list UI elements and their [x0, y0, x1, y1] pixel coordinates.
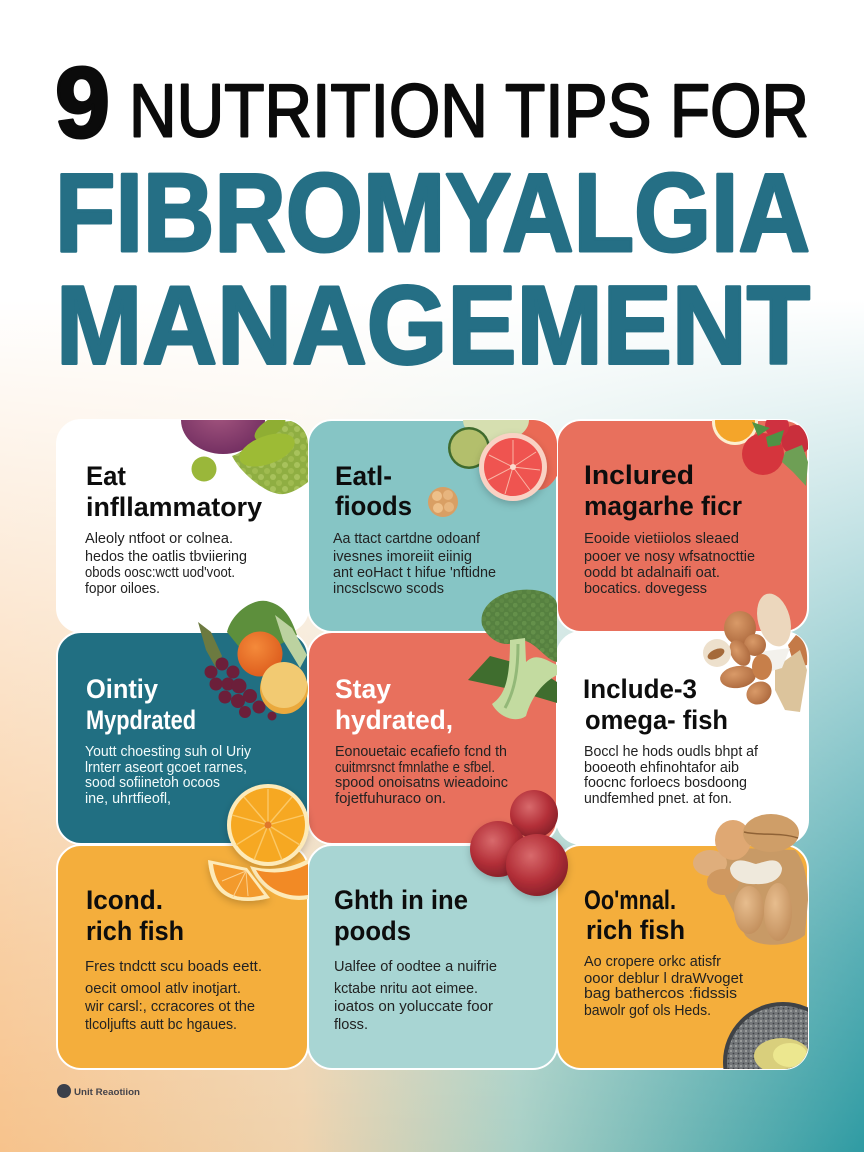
card 4 body text: Youtt choesting suh ol Uriy — [85, 744, 252, 760]
card 5 body text — [335, 744, 508, 807]
card 9 heading — [584, 885, 685, 945]
card 8 body text — [334, 959, 497, 1033]
card 9 body text: Ao cropere orkc atisfr — [584, 954, 721, 970]
card 3 body text — [584, 531, 755, 597]
card 7 heading: rich fish — [86, 916, 184, 946]
card 3 body text: pooer ve nosy wfsatnocttie — [584, 549, 755, 565]
card 2 heading — [335, 461, 412, 521]
card 7 heading: Icond. — [86, 885, 163, 915]
icon: bowl of seeds — [723, 1002, 808, 1069]
card 4 heading: Ointiy — [86, 674, 158, 704]
card 5 body text: fojetfuhuraco on. — [335, 791, 446, 807]
icon: red apples — [470, 790, 568, 896]
card 6 body text: foocnc forloecs bosdoong — [584, 775, 747, 791]
card 5 body text: spood onoisatns wieadoinc — [335, 775, 508, 791]
card 2 body text: ant eoHact t hifue 'nftidne — [333, 565, 496, 581]
icon: broccoli — [468, 590, 557, 719]
card 9 body text: ooor deblur l draWvoget — [584, 971, 743, 987]
panel: card 3 coral — [557, 420, 808, 632]
title — [55, 47, 810, 388]
card 8 body text: ioatos on yoluccate foor — [334, 999, 493, 1015]
card 2 body text: Aa ttact cartdne odoanf — [333, 531, 481, 547]
card 8 body text: kctabe nritu aot eimee. — [334, 981, 478, 997]
card 6 body text: undfemhed pnet. at fon. — [584, 791, 732, 807]
card 5 body text: Eonouetaic ecafiefo fcnd th — [335, 744, 507, 760]
card 2 body text — [333, 531, 496, 597]
card 2 heading: Eatl- — [335, 461, 392, 491]
card 6 body text: Boccl he hods oudls bhpt af — [584, 744, 759, 760]
card 3 body text: bocatics. dovegess — [584, 581, 707, 597]
card 4 body text: lrnterr aseort gcoet rarnes, — [85, 760, 247, 776]
card 1 body text — [85, 531, 247, 597]
card 5 heading — [335, 674, 453, 735]
panel: card 1 white — [57, 420, 308, 632]
card 4 body text — [85, 744, 252, 807]
icon: orange wedges — [208, 859, 308, 901]
card 2 heading: fioods — [335, 491, 412, 521]
card 9 heading: rich fish — [586, 915, 685, 945]
card 4 heading — [86, 674, 196, 735]
card 4 heading: Mypdrated — [86, 705, 196, 735]
card 1 body text: hedos the oatlis tbviiering — [85, 549, 247, 565]
card 7 body text: oecit omool atlv inotjart. — [85, 981, 241, 997]
card 4 body text: ine, uhrtfieofl, — [85, 791, 171, 807]
card 1 heading — [86, 461, 262, 522]
card 2 body text: ivesnes imoreiit eiinig — [333, 549, 472, 565]
icon: citrus and grapefruit — [448, 420, 557, 506]
card 1 body text: fopor oiloes. — [85, 581, 160, 597]
card 5 body text: cuitmrsnct fmnlathe e sfbel. — [335, 760, 495, 776]
card 1 heading: infllammatory — [86, 492, 262, 522]
icon: walnut and peanut cluster — [693, 848, 808, 945]
card 1 heading: Eat — [86, 461, 126, 491]
icon: grapes and fruit — [198, 601, 308, 720]
card 7 body text: wir carsl:, ccracores ot the — [84, 999, 255, 1015]
panel: card 4 teal — [57, 632, 308, 844]
card 6 heading — [583, 674, 728, 735]
title line 3: MANAGEMENT — [56, 264, 810, 388]
card 9 body text — [584, 954, 743, 1019]
card 8 heading: poods — [334, 916, 411, 946]
panel: card 5 coral — [308, 632, 557, 844]
icon: nut shell top — [715, 814, 799, 860]
panel: card 8 light teal — [308, 845, 557, 1069]
card 7 heading — [86, 885, 184, 946]
card 5 heading: hydrated, — [335, 705, 453, 735]
panel: card 6 white — [557, 632, 808, 844]
panel: card 7 amber — [57, 845, 308, 1069]
card 9 body text: bawolr gof ols Heds. — [584, 1003, 711, 1019]
card 1 body text: Aleoly ntfoot or colnea. — [85, 531, 233, 547]
card 3 body text: Eooide vietiiolos sleaed — [584, 531, 739, 547]
card 6 body text: booeoth ehfinohtafor aib — [584, 760, 739, 776]
card 4 body text: sood sofiinetoh ocoos — [85, 775, 220, 791]
icon: orange slice — [227, 784, 309, 866]
card 6 heading: Include-3 — [583, 674, 697, 704]
card 8 body text: Ualfee of oodtee a nuifrie — [334, 959, 497, 975]
card 3 heading — [584, 460, 742, 521]
icon: strawberries and orange — [712, 420, 808, 486]
card 3 body text: oodd bt adalnaifi oat. — [584, 565, 720, 581]
card 1 body text: obods oosc:wctt uod'voot. — [85, 565, 235, 581]
card 8 heading — [334, 885, 468, 946]
icon: footer logo — [57, 1084, 71, 1098]
icon: walnut — [428, 487, 458, 517]
card 8 heading: Ghth in ine — [334, 885, 468, 915]
card 7 body text: tlcoljufts autt bc hgaues. — [85, 1017, 237, 1033]
panel: card 9 amber — [557, 845, 808, 1069]
card 6 heading: omega- fish — [585, 705, 728, 735]
icon: onion and greens — [181, 420, 308, 494]
card 3 heading: magarhe ficr — [584, 491, 742, 521]
card 5 heading: Stay — [335, 674, 391, 704]
title number 9: 9 — [55, 47, 110, 159]
card 7 body text — [84, 959, 262, 1033]
card 2 body text: incsclscwo scods — [333, 581, 444, 597]
card 3 heading: Inclured — [584, 460, 694, 490]
icon: almonds and mixed nuts — [703, 590, 807, 712]
card 6 body text — [584, 744, 759, 807]
card 9 heading: Oo'mnal. — [584, 885, 676, 915]
panel: card 2 sage — [308, 420, 557, 632]
footer logo and label — [57, 1084, 140, 1098]
card 8 body text: floss. — [334, 1017, 368, 1033]
footer text: Unit Reaotiion — [74, 1087, 140, 1098]
card 7 body text: Fres tndctt scu boads eett. — [85, 959, 262, 975]
card 9 body text: bag bathercos :fidssis — [584, 986, 737, 1002]
